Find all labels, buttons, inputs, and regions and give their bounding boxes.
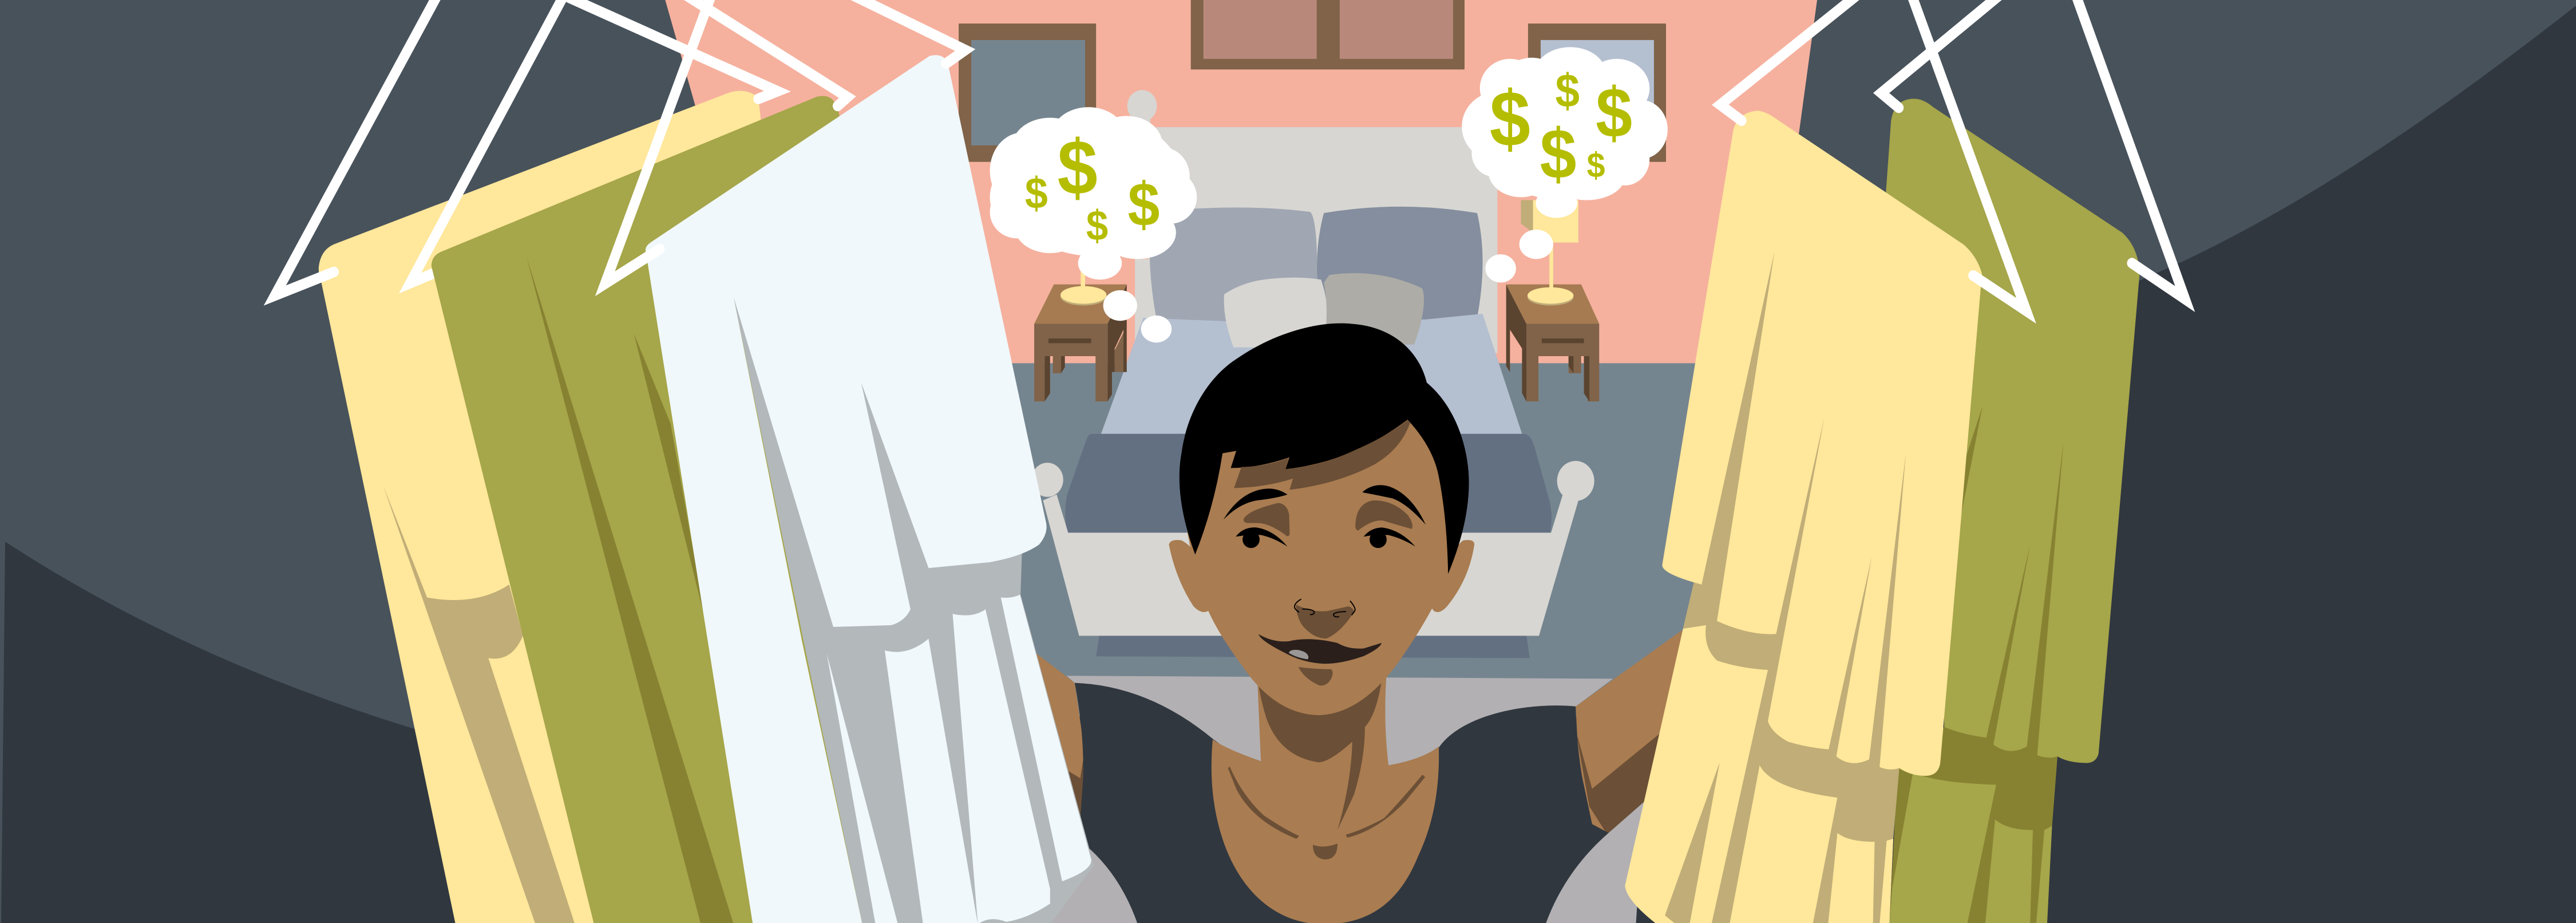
right pillow	[1317, 207, 1483, 322]
olive garment right	[1870, 99, 2139, 923]
right thought bubble dot small	[1485, 254, 1516, 282]
lower blanket	[1065, 434, 1552, 536]
right eyebrow	[1363, 485, 1426, 524]
left thought bubble dot large	[1103, 290, 1137, 321]
yellow garment upper layer	[1662, 111, 1982, 776]
left eye	[1236, 527, 1288, 548]
right collarbone	[1346, 775, 1425, 838]
under bed shadow	[1096, 634, 1530, 658]
shirt	[1075, 683, 1609, 923]
hanger: yellow garment	[275, 0, 438, 295]
face	[1187, 412, 1450, 715]
white garment lower strips	[827, 594, 1091, 923]
olive garment left	[432, 96, 876, 923]
mouth	[1259, 634, 1382, 664]
left garments and hangers	[275, 0, 876, 923]
right thought cloud: $	[1490, 76, 1530, 163]
left arm	[1036, 653, 1085, 821]
chest	[1212, 671, 1439, 923]
right nightstand	[1506, 285, 1599, 401]
hanger: yellow garment right outer	[1912, 0, 2026, 311]
hanger: olive garment	[684, 0, 848, 106]
hanger: yellow garment right inner	[1720, 0, 1862, 121]
nose shadow	[1296, 605, 1354, 638]
right thought cloud: $	[1587, 145, 1605, 185]
yellow garment left	[319, 91, 854, 923]
left thought cloud: $	[1058, 124, 1098, 211]
headboard	[1127, 90, 1497, 353]
left thought cloud: $	[1086, 202, 1108, 250]
right eye socket shadow	[1355, 500, 1412, 531]
left thought cloud: $	[1127, 170, 1160, 239]
lower left grey sleeve	[1023, 847, 1138, 923]
bed	[1031, 90, 1594, 658]
nose lines	[1295, 599, 1355, 617]
chin shadow	[1299, 667, 1332, 686]
right arm	[1576, 630, 1683, 835]
hanger: second wire	[410, 0, 777, 283]
tooth	[1289, 650, 1308, 660]
facial features	[1224, 420, 1426, 686]
white garment shadow layer	[734, 297, 1094, 923]
yellow garment lower strips	[1625, 625, 1893, 923]
floor	[968, 363, 1735, 716]
hanger: olive garment right inner	[1881, 0, 2004, 108]
left lamp	[1061, 259, 1106, 306]
hanger: olive garment right outer	[2076, 0, 2185, 299]
yellow garment right	[1625, 111, 1982, 923]
right lamp	[1521, 200, 1578, 306]
blanket	[1101, 314, 1522, 434]
left picture frame	[959, 23, 1096, 162]
left cushion	[1224, 278, 1328, 348]
right eye	[1364, 527, 1415, 548]
thought clouds	[990, 47, 1668, 342]
left collarbone	[1228, 767, 1299, 839]
grey collar band	[1067, 676, 1613, 789]
right thought cloud: $	[1596, 74, 1632, 152]
hanger: white garment	[605, 0, 712, 284]
yellow garment shadow layer	[1662, 252, 1906, 923]
left thought cloud	[990, 107, 1197, 279]
neck notch	[1313, 843, 1338, 859]
centre window	[1191, 0, 1465, 69]
hanger: top wire	[853, 0, 965, 64]
room scene	[665, 0, 1817, 923]
white garment	[646, 55, 1094, 923]
lower right grey sleeve	[1546, 802, 1644, 923]
forehead shadow	[1234, 420, 1410, 490]
white garment upper layer	[646, 55, 1047, 923]
pink wall	[665, 0, 1817, 371]
left nightstand	[1034, 285, 1127, 401]
neck shadow	[1258, 683, 1382, 830]
left thought cloud: $	[1025, 169, 1048, 218]
right picture frame	[1528, 23, 1666, 162]
left eye socket shadow	[1244, 503, 1289, 536]
right garments and hangers	[1625, 0, 2185, 923]
hair	[1180, 324, 1469, 574]
right ear	[1406, 540, 1474, 612]
right cushion	[1324, 273, 1424, 348]
left eyebrow	[1224, 488, 1288, 519]
left ear	[1169, 540, 1242, 612]
footboard	[1031, 461, 1594, 636]
right thought bubble dot large	[1520, 230, 1553, 259]
left thought bubble dot small	[1141, 315, 1172, 342]
right thought cloud	[1462, 47, 1668, 218]
right thought cloud: $	[1540, 115, 1576, 194]
left pillow	[1150, 207, 1324, 322]
right thought cloud: $	[1556, 65, 1580, 117]
